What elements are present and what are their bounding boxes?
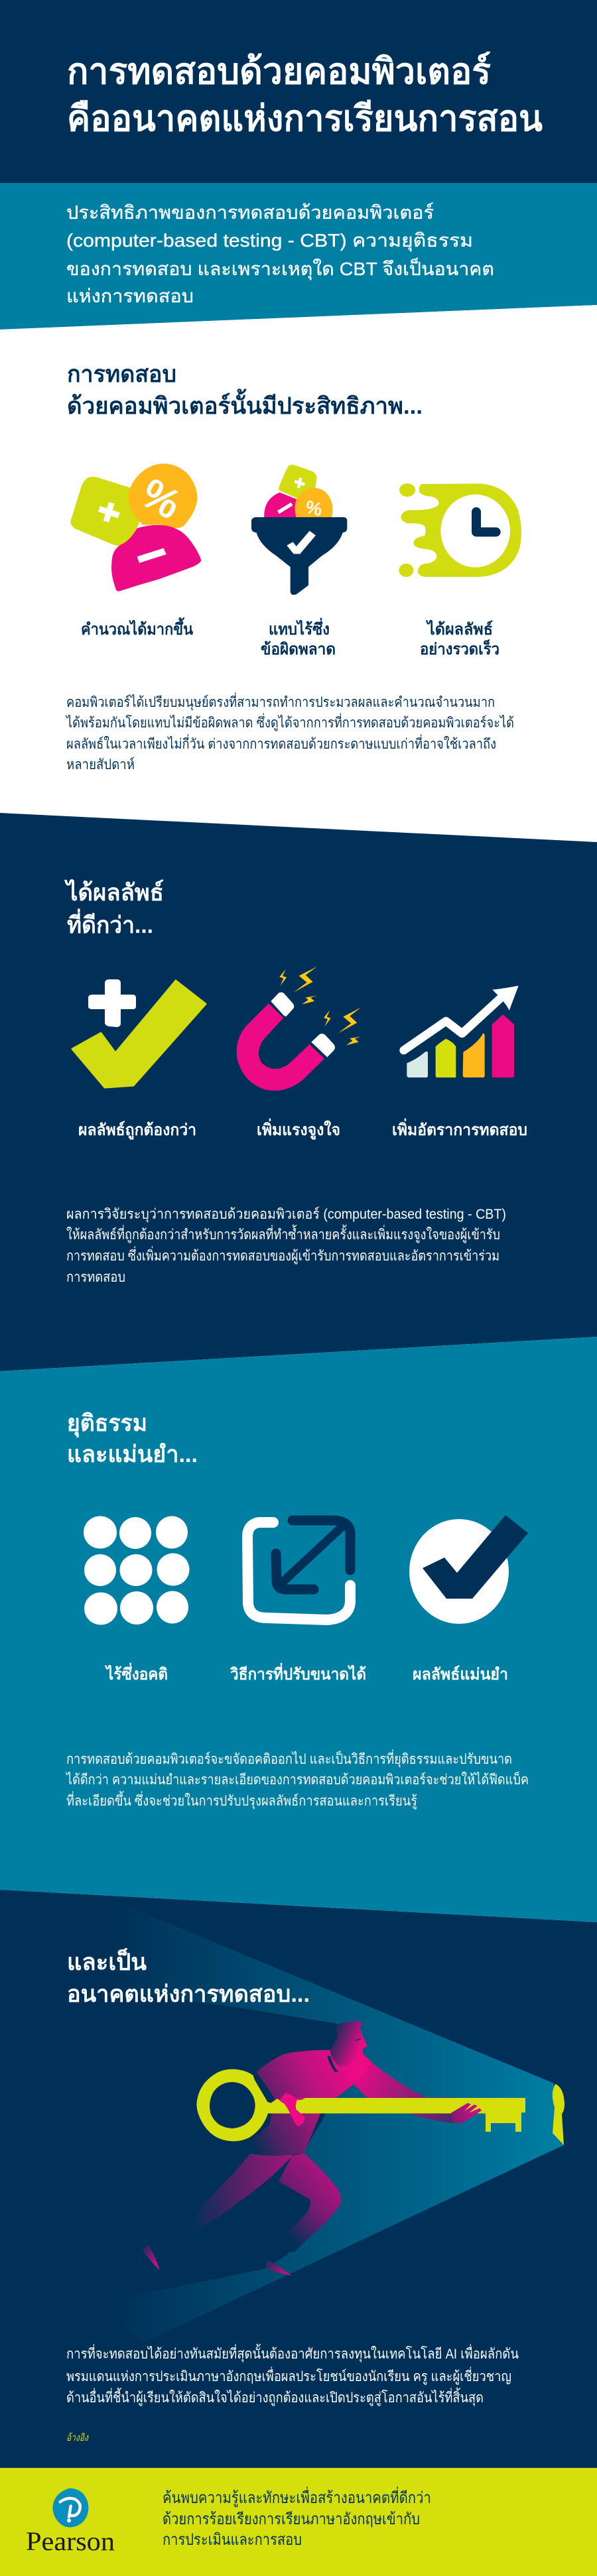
body text: better results (66, 1206, 506, 1285)
body text: future: ด้านอื่นที่ชี้นำผู้เรียนให้ตัดสินใจได้อย่างถูกต้องและเปิดประตูสู่โอกาสอันไร้ที่สิ้นสุด (66, 2388, 484, 2406)
heading: future of testing: อนาคตแห่งการทดสอบ... (67, 1981, 310, 2007)
icon: accurate check (409, 1515, 528, 1624)
body text: efficiency: หลายสัปดาห์ (66, 757, 135, 772)
icon: check and plus (72, 979, 206, 1087)
heading: future of testing (67, 1947, 310, 2007)
panel: fairness (0, 1337, 597, 1922)
body text: future: การที่จะทดสอบได้อย่างทันสมัยที่สุดนั้นต้องอาศัยการลงทุนในเทคโนโลยี AI เพื่อผลักดัน (66, 2344, 519, 2362)
label: no bias: ไร้ซึ่งอคติ (104, 1662, 168, 1684)
label: more calculations: คำนวณได้มากขึ้น (81, 617, 194, 639)
heading: better results: ที่ดีกว่า... (67, 908, 153, 938)
body text: fairness: ได้ดีกว่า ความแม่นยำและรายละเอียดของการทดสอบด้วยคอมพิวเตอร์จะช่วยให้ได้ฟีดแบ็ค (65, 1770, 529, 1788)
footer text (163, 2486, 431, 2549)
title (67, 51, 543, 139)
logo: Pearson (26, 2488, 115, 2556)
panel: efficiency (0, 305, 597, 842)
body text: future (66, 2344, 519, 2406)
label: fast results (420, 619, 499, 658)
body text: efficiency: ได้พร้อมกันโดยแทบไม่มีข้อผิดพลาด ซึ่งดูได้จากการที่การทดสอบด้วยคอมพิวเตอร์จะได้ (65, 713, 514, 731)
heading: efficiency: ด้วยคอมพิวเตอร์นั้นมีประสิทธิภาพ... (67, 389, 423, 419)
label: almost no errors: ข้อผิดพลาด (261, 641, 336, 658)
icon: calculation shapes (70, 463, 201, 591)
icon: dot grid (84, 1516, 190, 1625)
intro text: แห่งการทดสอบ (66, 286, 194, 306)
icon: key (196, 2069, 525, 2141)
panel: footer (0, 2468, 597, 2576)
label: fast results: ได้ผลลัพธ์ (425, 619, 493, 639)
body text: better results: การทดสอบ ซึ่งเพิ่มความต้องการทดสอบของผู้เข้ารับการทดสอบและอัตราการเข้าร่วม (66, 1246, 499, 1264)
label: fast results: อย่างรวดเร็ว (420, 639, 499, 658)
heading: efficiency: การทดสอบ (67, 361, 176, 387)
body text: efficiency: ผลลัพธ์ในเวลาเพียงไม่กี่วัน ต่างจากการทดสอบด้วยกระดาษแบบเก่าที่อาจใช้เวลาถึง (66, 734, 496, 752)
heading: efficiency (67, 361, 423, 419)
icon: calculation shapes: % (133, 469, 189, 528)
intro text: (computer-based testing - CBT) ความยุติธรรม (66, 230, 473, 252)
label: almost no errors (261, 617, 336, 658)
label: accurate results: ผลลัพธ์แม่นยำ (413, 1665, 508, 1684)
body text: fairness (65, 1749, 529, 1809)
body text: better results: ให้ผลลัพธ์ที่ถูกต้องกว่าสำหรับการวัดผลที่ทำซ้ำหลายครั้งและเพิ่มแรงจูงใจของผู้เข้ารับ (66, 1225, 500, 1243)
label: more motivation: เพิ่มแรงจูงใจ (257, 1118, 340, 1140)
intro text: ประสิทธิภาพของการทดสอบด้วยคอมพิวเตอร์ (66, 202, 434, 223)
icon: funnel (251, 465, 347, 595)
body text: efficiency (65, 692, 514, 772)
panel: title band (0, 0, 597, 183)
body text: future: พรมแดนแห่งการประเมินภาษาอังกฤษเพื่อผลประโยชน์ของนักเรียน ครู และผู้เชี่ยวชาญ (66, 2366, 511, 2385)
logo: Pearson: Pearson (26, 2526, 115, 2556)
footer text: ด้วยการร้อยเรียงการเรียนภาษาอังกฤษเข้ากับ (163, 2510, 420, 2528)
body text: better results: การทดสอบ (66, 1270, 125, 1285)
heading: future of testing: และเป็น (67, 1947, 147, 1975)
heading: better results (64, 879, 164, 938)
icon: resize arrows (247, 1520, 350, 1620)
illustration: man carrying key (143, 2020, 525, 2276)
body text: better results: ผลการวิจัยระบุว่าการทดสอบด้วยคอมพิวเตอร์ (computer-based testing - CBT) (66, 1206, 506, 1223)
footer text: ค้นพบความรู้และทักษะเพื่อสร้างอนาคตที่ดีกว่า (163, 2486, 431, 2508)
body text: fairness: การทดสอบด้วยคอมพิวเตอร์จะขจัดอคติออกไป และเป็นวิธีการที่ยุติธรรมและปรับขนาด (66, 1749, 512, 1768)
illustration: light beam (93, 1901, 564, 2342)
heading: fairness: ยุติธรรม (67, 1410, 147, 1438)
title: คืออนาคตแห่งการเรียนการสอน (67, 99, 543, 139)
heading: better results: ได้ผลลัพธ์ (64, 879, 164, 906)
heading: fairness: และแม่นยำ... (67, 1441, 198, 1467)
label: higher test rate: เพิ่มอัตราการทดสอบ (392, 1118, 527, 1139)
intro text: ของการทดสอบ และเพราะเหตุใด CBT จึงเป็นอนาคต (66, 257, 494, 280)
body text: efficiency: คอมพิวเตอร์ได้เปรียบมนุษย์ตรงที่สามารถทำการประมวลผลและคำนวณจำนวนมาก (66, 692, 495, 711)
panel: better results (0, 813, 597, 1371)
panel: future of testing (0, 1890, 597, 2468)
label: more accurate results: ผลลัพธ์ถูกต้องกว่า (78, 1121, 196, 1140)
footer text: การประเมินและการสอบ (163, 2531, 302, 2549)
title: การทดสอบด้วยคอมพิวเตอร์ (67, 51, 491, 92)
icon: magnet (237, 967, 361, 1091)
label: almost no errors: แทบไร้ซึ่ง (269, 617, 330, 639)
icon: fast clock (399, 483, 521, 577)
label: scalable method: วิธีการที่ปรับขนาดได้ (230, 1662, 366, 1684)
icon: rising bar chart (404, 986, 519, 1077)
heading: fairness (67, 1410, 198, 1467)
body text: fairness: ที่ละเอียดขึ้น ซึ่งจะช่วยในการปรับปรุงผลลัพธ์การสอนและการเรียนรู้ (66, 1791, 417, 1809)
panel: intro band (0, 183, 597, 330)
intro text (66, 202, 494, 306)
references link: อ้างอิง (66, 2432, 89, 2443)
icon: keyhole (553, 2084, 564, 2145)
icon: funnel: % (304, 497, 324, 520)
